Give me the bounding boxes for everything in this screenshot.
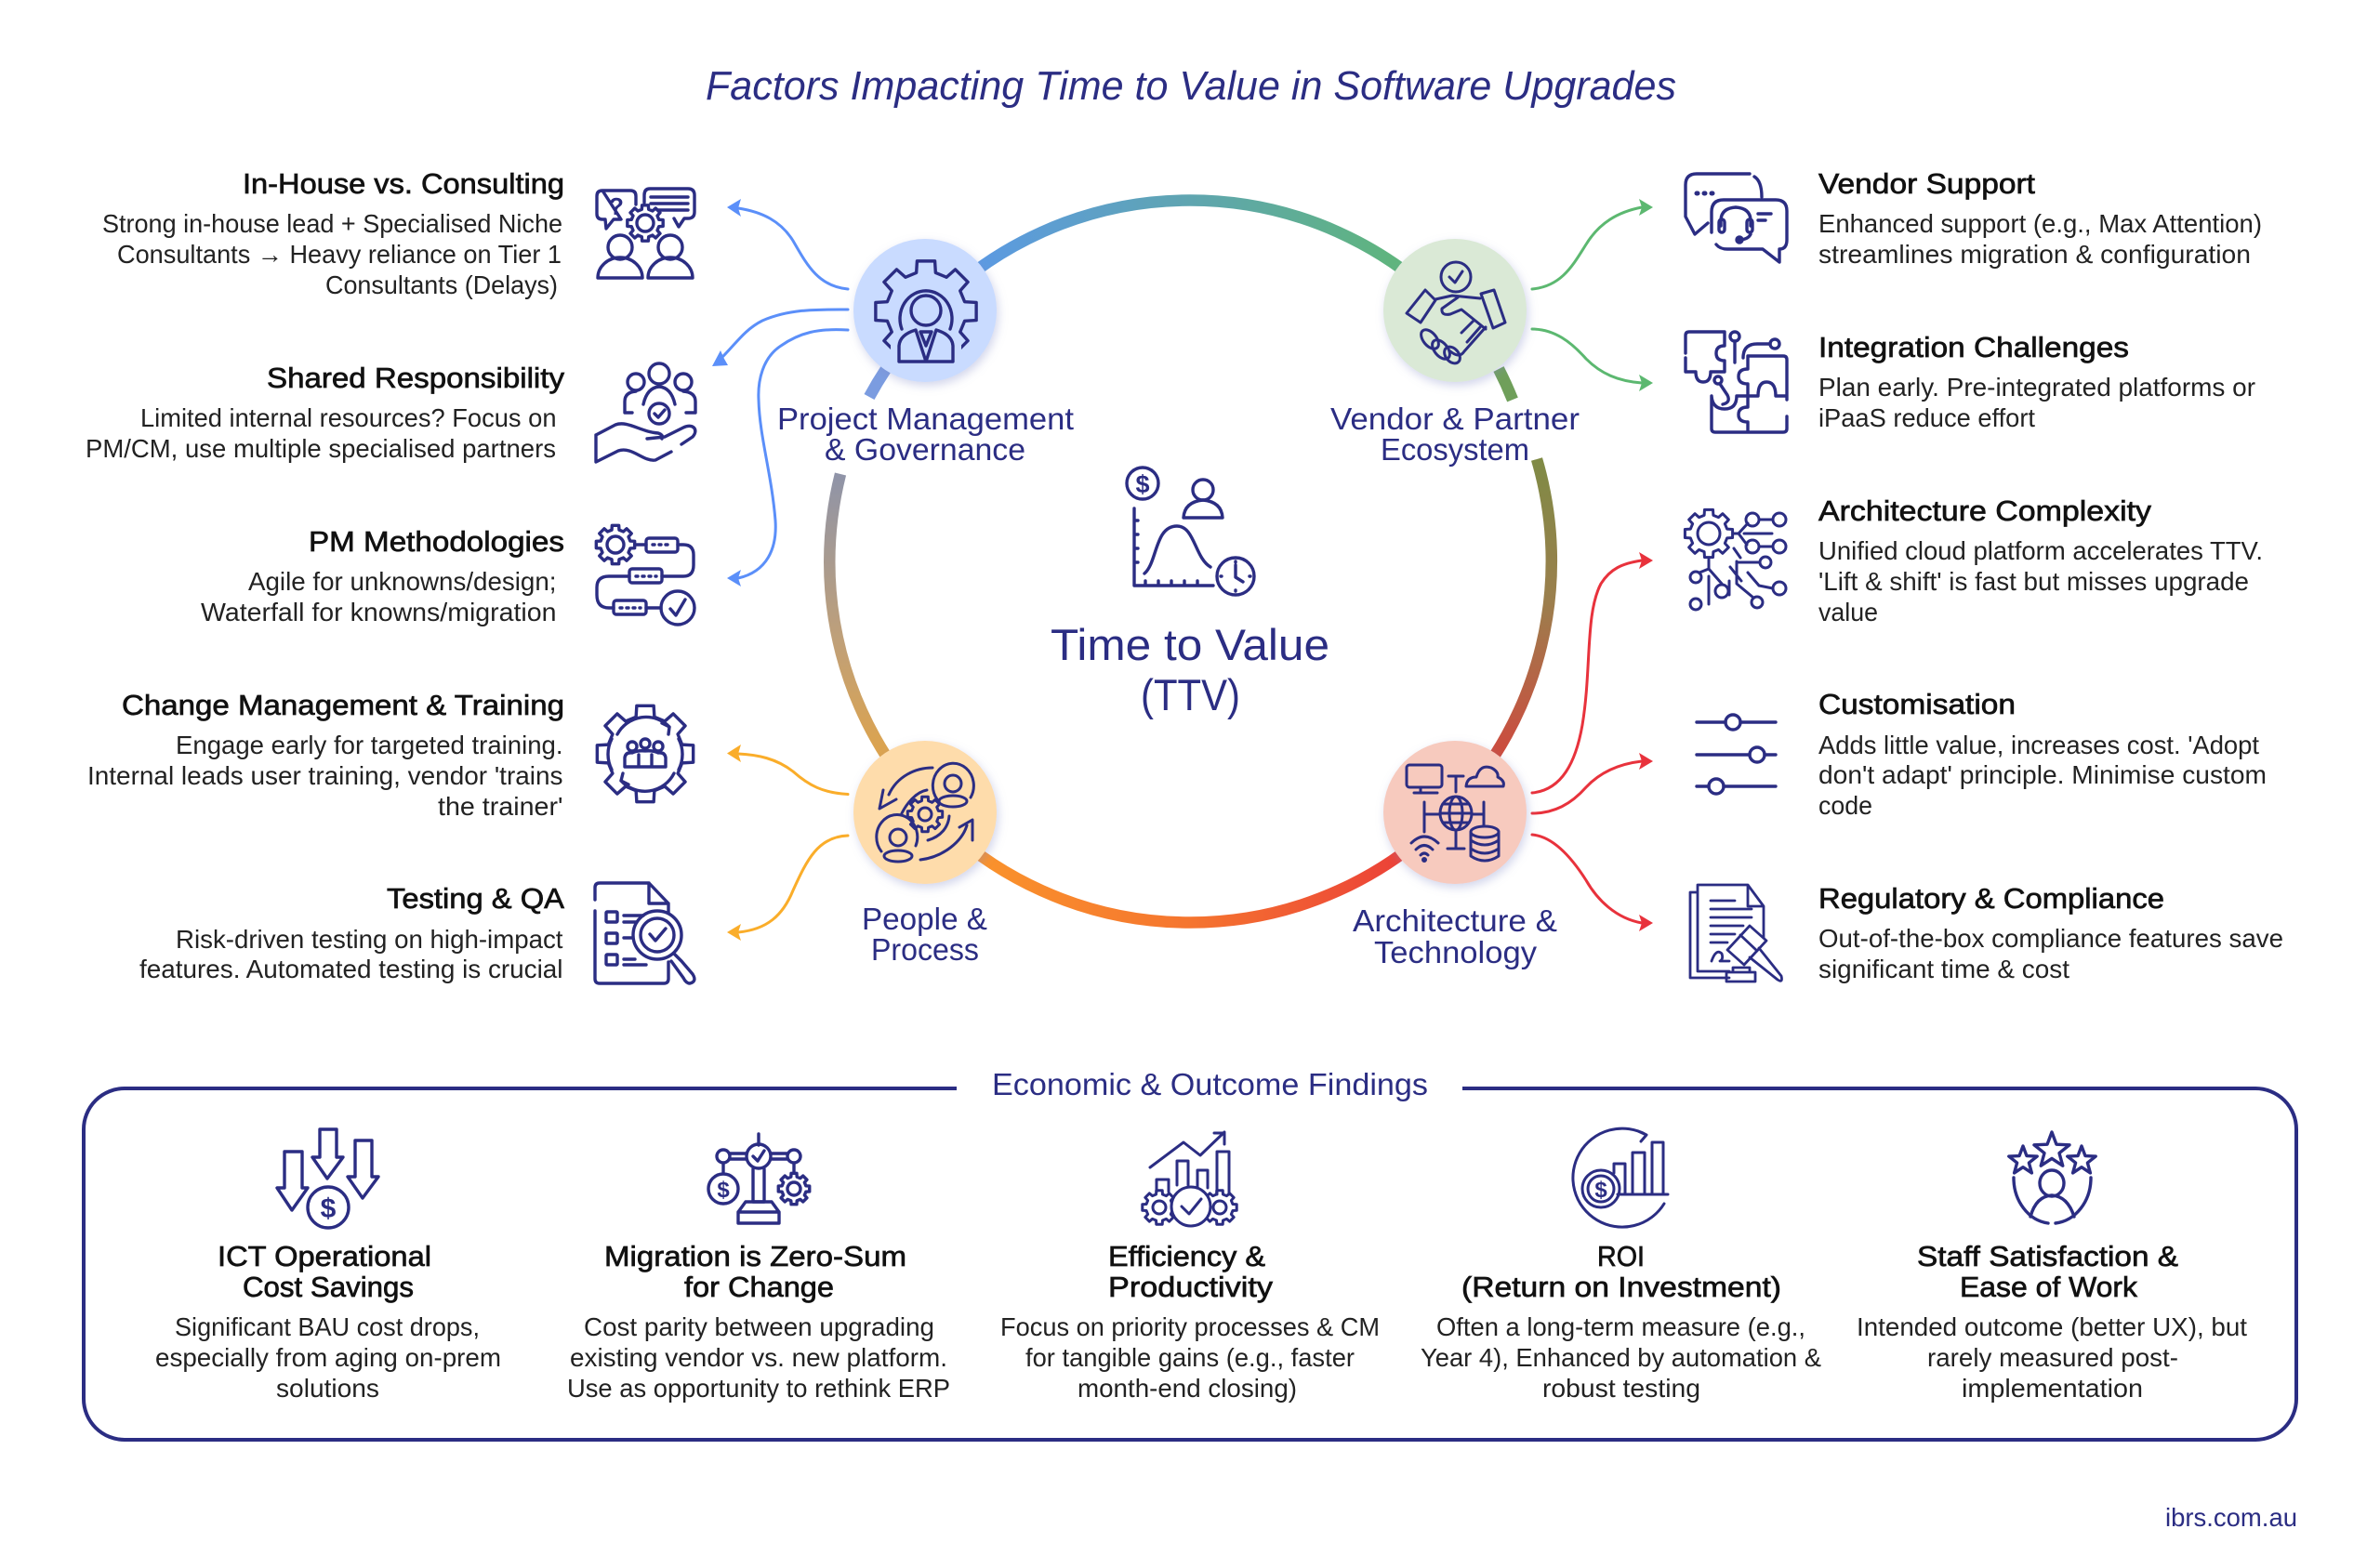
icon: document with gavel	[1690, 885, 1781, 982]
node label	[1353, 903, 1557, 969]
factors: right column	[1685, 167, 2283, 983]
factor: shared responsibility	[86, 362, 695, 463]
factor: integration challenges: Plan early. Pre-integrated platforms or	[1818, 373, 2255, 402]
node: architecture and technology	[1353, 741, 1557, 969]
arrows: architecture (red)	[1532, 552, 1653, 931]
centre label: (TTV)	[1141, 670, 1240, 719]
factor: change management and training: Change Management & Training	[122, 689, 564, 721]
factor: pm methodologies: Waterfall for knowns/migration	[201, 598, 556, 626]
icon: sliders	[1697, 715, 1776, 794]
arrows: vendor ecosystem (green)	[1532, 199, 1653, 391]
factor: pm methodologies: PM Methodologies	[309, 525, 564, 558]
finding: efficiency and productivity: Focus on priority processes & CM	[1000, 1312, 1380, 1341]
ring: gradient cycle	[829, 200, 1552, 923]
finding: staff satisfaction: implementation	[1962, 1374, 2143, 1403]
factor: regulatory and compliance: significant time & cost	[1818, 955, 2069, 983]
finding: efficiency and productivity: month-end closing)	[1078, 1374, 1297, 1403]
factor: customisation: Customisation	[1818, 688, 2016, 720]
panel heading: Economic & Outcome Findings	[992, 1067, 1428, 1101]
icon: growth chart with gears	[1143, 1132, 1236, 1226]
finding: ict operational cost savings: solutions	[276, 1374, 379, 1403]
factor: integration challenges: iPaaS reduce effort	[1818, 403, 2035, 432]
node label	[862, 902, 987, 967]
factor: pm methodologies: Agile for unknowns/design;	[248, 567, 556, 596]
factor: in-house vs consulting	[102, 167, 694, 299]
title: Factors Impacting Time to Value in Software Upgrades	[706, 63, 1676, 109]
finding: efficiency and productivity: Productivity	[1108, 1271, 1274, 1303]
factor: in-house vs consulting: Consultants (Delays)	[325, 270, 558, 299]
icon: value curve chart	[1127, 468, 1254, 595]
factor: customisation: Adds little value, increases cost. 'Adopt	[1818, 731, 2259, 759]
finding: staff satisfaction: Staff Satisfaction &	[1917, 1240, 2178, 1272]
factor: regulatory and compliance	[1690, 882, 2283, 983]
factor: regulatory and compliance: Out-of-the-box compliance features save	[1818, 924, 2283, 953]
finding: efficiency and productivity	[1000, 1132, 1380, 1403]
factor: in-house vs consulting: In-House vs. Consulting	[243, 167, 564, 200]
finding: return on investment: robust testing	[1542, 1374, 1700, 1403]
factor: customisation: code	[1818, 791, 1872, 820]
finding: migration is zero-sum	[567, 1134, 950, 1403]
finding: migration is zero-sum: Use as opportunity to rethink ERP	[567, 1374, 950, 1403]
finding: return on investment: (Return on Investment)	[1461, 1271, 1781, 1303]
icon: test document with magnifier	[595, 883, 694, 983]
icon: technology network	[1407, 765, 1503, 861]
node label: Architecture &	[1353, 903, 1557, 938]
icon: gear with manager	[876, 261, 976, 366]
node label	[1330, 402, 1580, 467]
centre: time to value	[1051, 468, 1329, 719]
finding: ict operational cost savings: especially from aging on-prem	[155, 1343, 501, 1372]
source: website: ibrs.com.au	[2165, 1503, 2297, 1532]
finding: staff satisfaction: Intended outcome (better UX), but	[1857, 1312, 2247, 1341]
icon: person with stars	[2009, 1132, 2096, 1223]
icon: value curve chart: $	[1135, 470, 1150, 498]
factor: vendor support	[1686, 167, 2262, 269]
node: project management and governance	[777, 239, 1074, 467]
factor: architecture complexity: 'Lift & shift' is fast but misses upgrade	[1818, 567, 2249, 596]
finding: migration is zero-sum: existing vendor vs. new platform.	[570, 1343, 947, 1372]
factor: vendor support: Vendor Support	[1818, 167, 2035, 200]
factor: customisation	[1697, 688, 2267, 820]
node: people and process	[853, 741, 997, 967]
factor: architecture complexity: Unified cloud platform accelerates TTV.	[1818, 536, 2263, 565]
finding: return on investment	[1421, 1128, 1821, 1403]
node label: Process	[871, 932, 979, 967]
node label: & Governance	[825, 432, 1025, 467]
panel frame	[84, 1088, 2296, 1440]
factor: change management and training: the trainer'	[438, 792, 563, 821]
factor: shared responsibility: Shared Responsibility	[267, 362, 565, 394]
centre label: Time to Value	[1051, 620, 1329, 669]
node: vendor and partner ecosystem	[1330, 239, 1580, 467]
finding: migration is zero-sum: for Change	[684, 1271, 834, 1303]
finding: migration is zero-sum: Migration is Zero-Sum	[604, 1240, 906, 1272]
panel: economic and outcome findings	[84, 1067, 2296, 1440]
finding: efficiency and productivity: Efficiency &	[1108, 1240, 1265, 1272]
factor: shared responsibility: PM/CM, use multiple specialised partners	[86, 434, 556, 463]
factor: integration challenges	[1686, 331, 2255, 432]
factor: testing and qa: Testing & QA	[387, 882, 564, 915]
icon: falling arrows and coin: $	[321, 1193, 337, 1224]
factor: vendor support: Enhanced support (e.g., Max Attention)	[1818, 209, 2262, 238]
icon: team on open hand	[596, 363, 695, 462]
factor: architecture complexity: value	[1818, 598, 1878, 626]
factor: shared responsibility: Limited internal resources? Focus on	[140, 403, 556, 432]
node label: Technology	[1374, 935, 1538, 969]
finding: return on investment: ROI	[1597, 1240, 1645, 1272]
node label	[777, 402, 1074, 467]
finding: staff satisfaction	[1857, 1132, 2247, 1403]
node label: Vendor & Partner	[1330, 402, 1580, 436]
icon: gear with circuit nodes	[1685, 509, 1786, 610]
factor: testing and qa	[139, 882, 694, 983]
icon: balance scale: $	[717, 1178, 730, 1203]
factor: change management and training	[87, 689, 694, 821]
node label: Project Management	[777, 402, 1074, 436]
arrows: people and process (orange)	[727, 745, 848, 941]
factor: testing and qa: features. Automated testing is crucial	[139, 955, 563, 983]
finding: migration is zero-sum: Cost parity between upgrading	[584, 1312, 934, 1341]
factor: pm methodologies	[201, 525, 694, 626]
factor: in-house vs consulting: Consultants → Heavy reliance on Tier 1	[117, 240, 562, 269]
factor: customisation: don't adapt' principle. Minimise custom	[1818, 760, 2267, 789]
factor: architecture complexity: Architecture Complexity	[1818, 494, 2152, 527]
finding: ict operational cost savings: Cost Savings	[243, 1271, 414, 1303]
icon: puzzle with circuit	[1686, 332, 1787, 432]
factor: in-house vs consulting: Strong in-house lead + Specialised Niche	[102, 209, 562, 238]
arrows: project management (blue)	[712, 199, 848, 586]
finding: ict operational cost savings: Significant BAU cost drops,	[175, 1312, 480, 1341]
finding: ict operational cost savings: ICT Operational	[218, 1240, 431, 1272]
finding: return on investment: Year 4), Enhanced by automation &	[1421, 1343, 1821, 1372]
icon: coin with bars in cycle	[1573, 1128, 1668, 1227]
factor: architecture complexity	[1685, 494, 2263, 626]
icon: balance scale	[708, 1134, 810, 1223]
icon: gear with team	[597, 705, 694, 802]
icon: falling arrows and coin	[277, 1129, 378, 1228]
icon: workflow	[596, 525, 694, 625]
finding: efficiency and productivity: for tangible gains (e.g., faster	[1025, 1343, 1355, 1372]
finding: staff satisfaction: Ease of Work	[1960, 1271, 2137, 1303]
finding: ict operational cost savings	[155, 1129, 501, 1403]
icon: support chat	[1686, 174, 1787, 262]
finding: staff satisfaction: rarely measured post-	[1927, 1343, 2178, 1372]
icon: people exchange with gear	[877, 763, 973, 862]
icon: handshake with check	[1407, 262, 1505, 366]
factor: testing and qa: Risk-driven testing on high-impact	[176, 925, 563, 954]
factor: regulatory and compliance: Regulatory & Compliance	[1818, 882, 2164, 915]
finding: return on investment: Often a long-term measure (e.g.,	[1436, 1312, 1805, 1341]
icon: discussion team	[597, 189, 694, 278]
factor: change management and training: Engage early for targeted training.	[176, 731, 563, 759]
centre label	[1051, 620, 1329, 719]
factor: vendor support: streamlines migration & configuration	[1818, 240, 2251, 269]
factor: change management and training: Internal leads user training, vendor 'trains	[87, 761, 563, 790]
factor: integration challenges: Integration Challenges	[1818, 331, 2129, 363]
icon: coin with bars in cycle: $	[1594, 1178, 1607, 1203]
icon: discussion team: ?	[609, 192, 624, 220]
node label: People &	[862, 902, 987, 936]
node label: Ecosystem	[1381, 432, 1529, 467]
factors: left column	[86, 167, 695, 983]
